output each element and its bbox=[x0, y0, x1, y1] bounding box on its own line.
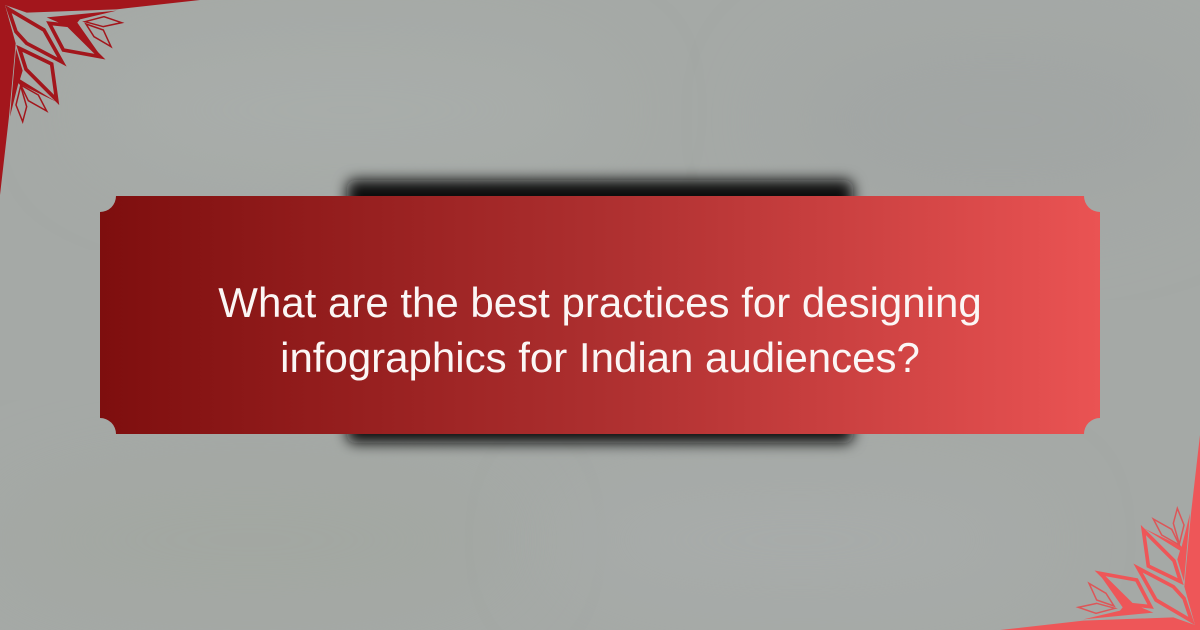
title: What are the best practices for designing bbox=[218, 279, 982, 326]
corner ornament: top left bbox=[0, 0, 200, 195]
title line 2: infographics for Indian audiences? bbox=[280, 334, 920, 381]
banner with notched corners bbox=[100, 196, 1100, 434]
blurred shadow behind banner bbox=[347, 180, 853, 443]
corner ornament: bottom right bbox=[1000, 435, 1200, 630]
